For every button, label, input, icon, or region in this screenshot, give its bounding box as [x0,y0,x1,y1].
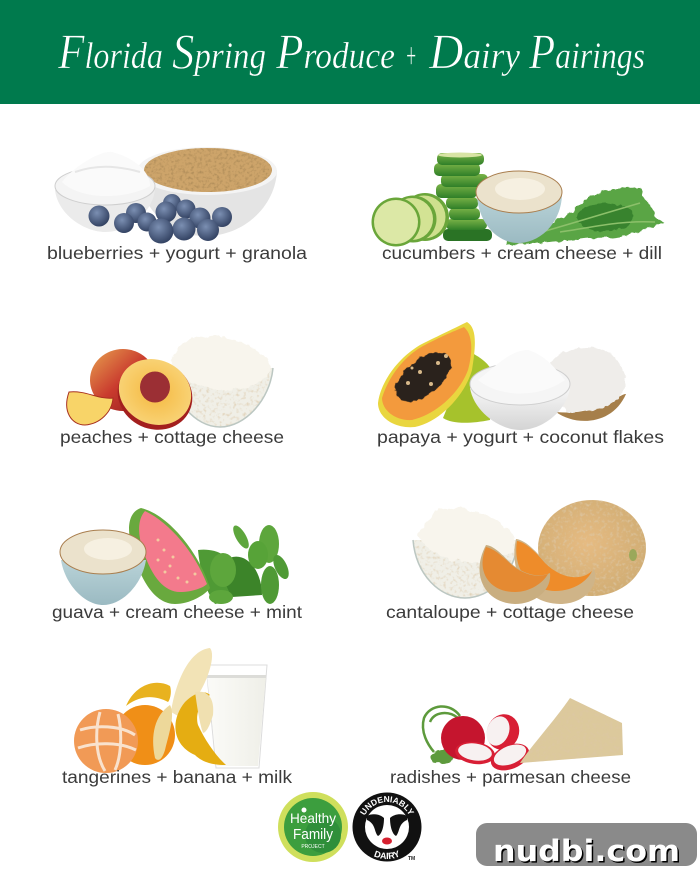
logo: Undeniably Dairy: TM [408,856,415,862]
icon: cream cheese bowl [60,530,146,605]
panel: cantaloupe cottage cheese [386,500,646,622]
title [57,23,645,79]
icon: whole peach [90,349,156,411]
panel: radishes parmesan [390,698,631,787]
logo: Healthy Family Project: Family [293,826,333,843]
icon: whole radish [441,716,485,760]
title: Dairy [428,23,521,79]
icon: radish greens [423,706,460,752]
icon: papaya half [378,322,475,427]
icon: yogurt bowl [470,350,570,430]
logo: Undeniably Dairy: DAIRY [374,850,398,860]
panel: cucumbers cream cheese dill [372,152,664,263]
logo: Healthy Family Project: PROJECT [301,844,325,850]
icon: radish slices [454,710,533,776]
logo: Undeniably Dairy: UNDENIABLY [360,796,414,815]
icon: cottage cheese bowl [168,335,273,427]
panel: papaya yogurt coconut [377,322,664,447]
icon: green papaya back [443,352,492,423]
icon: banana [126,648,226,765]
watermark: nudbi.com [494,836,682,870]
logo: Healthy Family Project [278,792,348,862]
logo: Healthy Family Project: Healthy [290,810,336,826]
watermark [476,823,697,870]
icon: whole tangerine [115,705,175,765]
icon: cream cheese bowl [476,171,562,243]
icon: melon slice back [514,539,595,604]
icon: dill [505,188,664,244]
icon: cantaloupe stem [629,549,637,561]
icon: cottage cheese bowl [413,507,518,598]
label: radishes + parmesan cheese [390,767,631,787]
label: peaches + cottage cheese [60,427,284,447]
title: Florida [57,23,163,79]
icon: mint [198,523,292,604]
icon: coconut [550,347,626,421]
icon: blueberries [88,194,232,244]
panel: peaches cottage cheese [60,335,284,447]
icon: guava [129,508,210,604]
icon: radish leaf [431,750,453,764]
icon: peach half [106,347,204,442]
icon: cucumber stack [434,152,492,241]
icon: yogurt bowl [55,152,155,232]
title: Produce [275,23,395,79]
icon: melon slice front [479,545,550,604]
icon: cucumber slices [372,193,449,246]
label: cucumbers + cream cheese + dill [382,243,662,263]
label: tangerines + banana + milk [62,767,292,787]
title: + [405,36,417,77]
panel: blueberries yogurt granola [47,147,307,263]
header band [0,0,700,104]
panel: guava cream cheese mint [52,508,302,622]
icon: granola bowl [137,147,277,236]
logo: Undeniably Dairy [352,792,422,862]
icon: peeled tangerine [74,709,138,773]
label: blueberries + yogurt + granola [47,243,307,263]
icon: peach slice [67,392,113,425]
label: cantaloupe + cottage cheese [386,602,634,622]
panel: tangerines banana milk [62,648,292,787]
icon: glass of milk [206,665,267,768]
label: papaya + yogurt + coconut flakes [377,427,664,447]
icon: cantaloupe [538,500,646,596]
label: guava + cream cheese + mint [52,602,302,622]
title: Spring [172,23,266,79]
title: Pairings [528,23,645,79]
watermark: nudbi.com [493,834,680,868]
icon: parmesan [520,698,623,763]
